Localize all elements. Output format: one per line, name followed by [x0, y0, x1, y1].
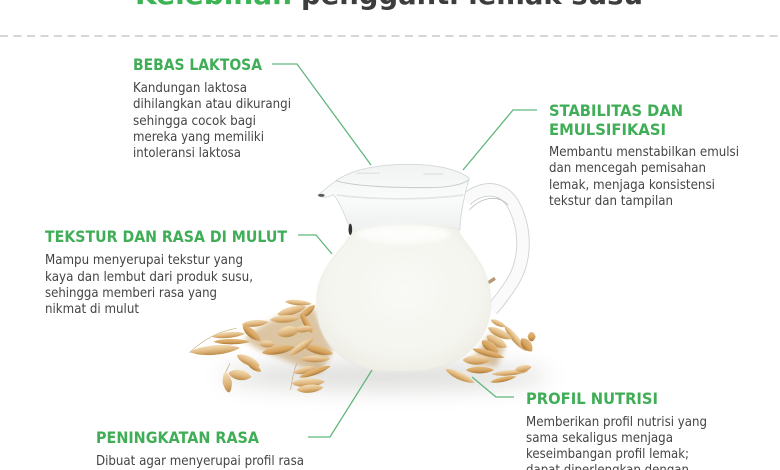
illustration: milk jug with oats: [189, 164, 550, 394]
body text: sama sekaligus menjaga: [526, 430, 673, 446]
heading: STABILITAS DAN: [549, 101, 683, 120]
oats: right cluster: [444, 317, 536, 386]
body text: Dibuat agar menyerupai profil rasa: [96, 453, 304, 469]
callout: stabilitas dan emulsifikasi: [463, 101, 739, 209]
connector: [298, 235, 332, 254]
connector: [308, 370, 372, 437]
callout: bebas laktosa: [133, 55, 371, 165]
jug milk: [317, 224, 491, 371]
glass dark mark: [348, 224, 352, 235]
shadow: [220, 362, 550, 390]
body text: kaya dan lembut dari produk susu,: [45, 269, 253, 285]
body text: Kandungan laktosa: [133, 80, 247, 96]
heading: EMULSIFIKASI: [549, 120, 666, 139]
body text: dan mencegah pemisahan: [549, 160, 706, 176]
oats: left cluster: [189, 299, 334, 394]
jug glass neck: [318, 164, 469, 232]
connector: [472, 377, 514, 397]
connector: [463, 110, 537, 170]
body text: [45, 252, 253, 317]
body text: tekstur dan tampilan: [549, 193, 673, 209]
body text: mereka yang memiliki: [133, 129, 264, 145]
body text: nikmat di mulut: [45, 301, 139, 317]
heading: PENINGKATAN RASA: [96, 428, 260, 447]
callout: tekstur dan rasa: [45, 227, 332, 317]
milk surface: [357, 225, 450, 243]
body text: intoleransi laktosa: [133, 145, 241, 161]
jug handle: [466, 190, 523, 309]
callout: profil nutrisi: [472, 377, 707, 470]
jug front lip: [336, 180, 469, 188]
heading: TEKSTUR DAN RASA DI MULUT: [45, 227, 287, 246]
body text: lemak, menjaga konsistensi: [549, 177, 715, 193]
body text: sehingga cocok bagi: [133, 113, 256, 129]
jug highlights: [337, 173, 463, 199]
body text: sehingga memberi rasa yang: [45, 285, 217, 301]
body text: [549, 144, 739, 209]
heading: BEBAS LAKTOSA: [133, 55, 263, 74]
body text: Membantu menstabilkan emulsi: [549, 144, 739, 160]
body text: Memberikan profil nutrisi yang: [526, 414, 707, 430]
body text: Mampu menyerupai tekstur yang: [45, 252, 243, 268]
jug spout tip: [318, 194, 325, 197]
body text: keseimbangan profil lemak;: [526, 446, 689, 462]
body text: [133, 80, 291, 161]
body text: [526, 414, 707, 470]
connector: [272, 64, 371, 165]
heading: [549, 101, 683, 139]
body text: dihilangkan atau dikurangi: [133, 96, 291, 112]
callout: peningkatan rasa: [96, 370, 372, 469]
heading: PROFIL NUTRISI: [526, 389, 658, 408]
title: [135, 0, 643, 11]
